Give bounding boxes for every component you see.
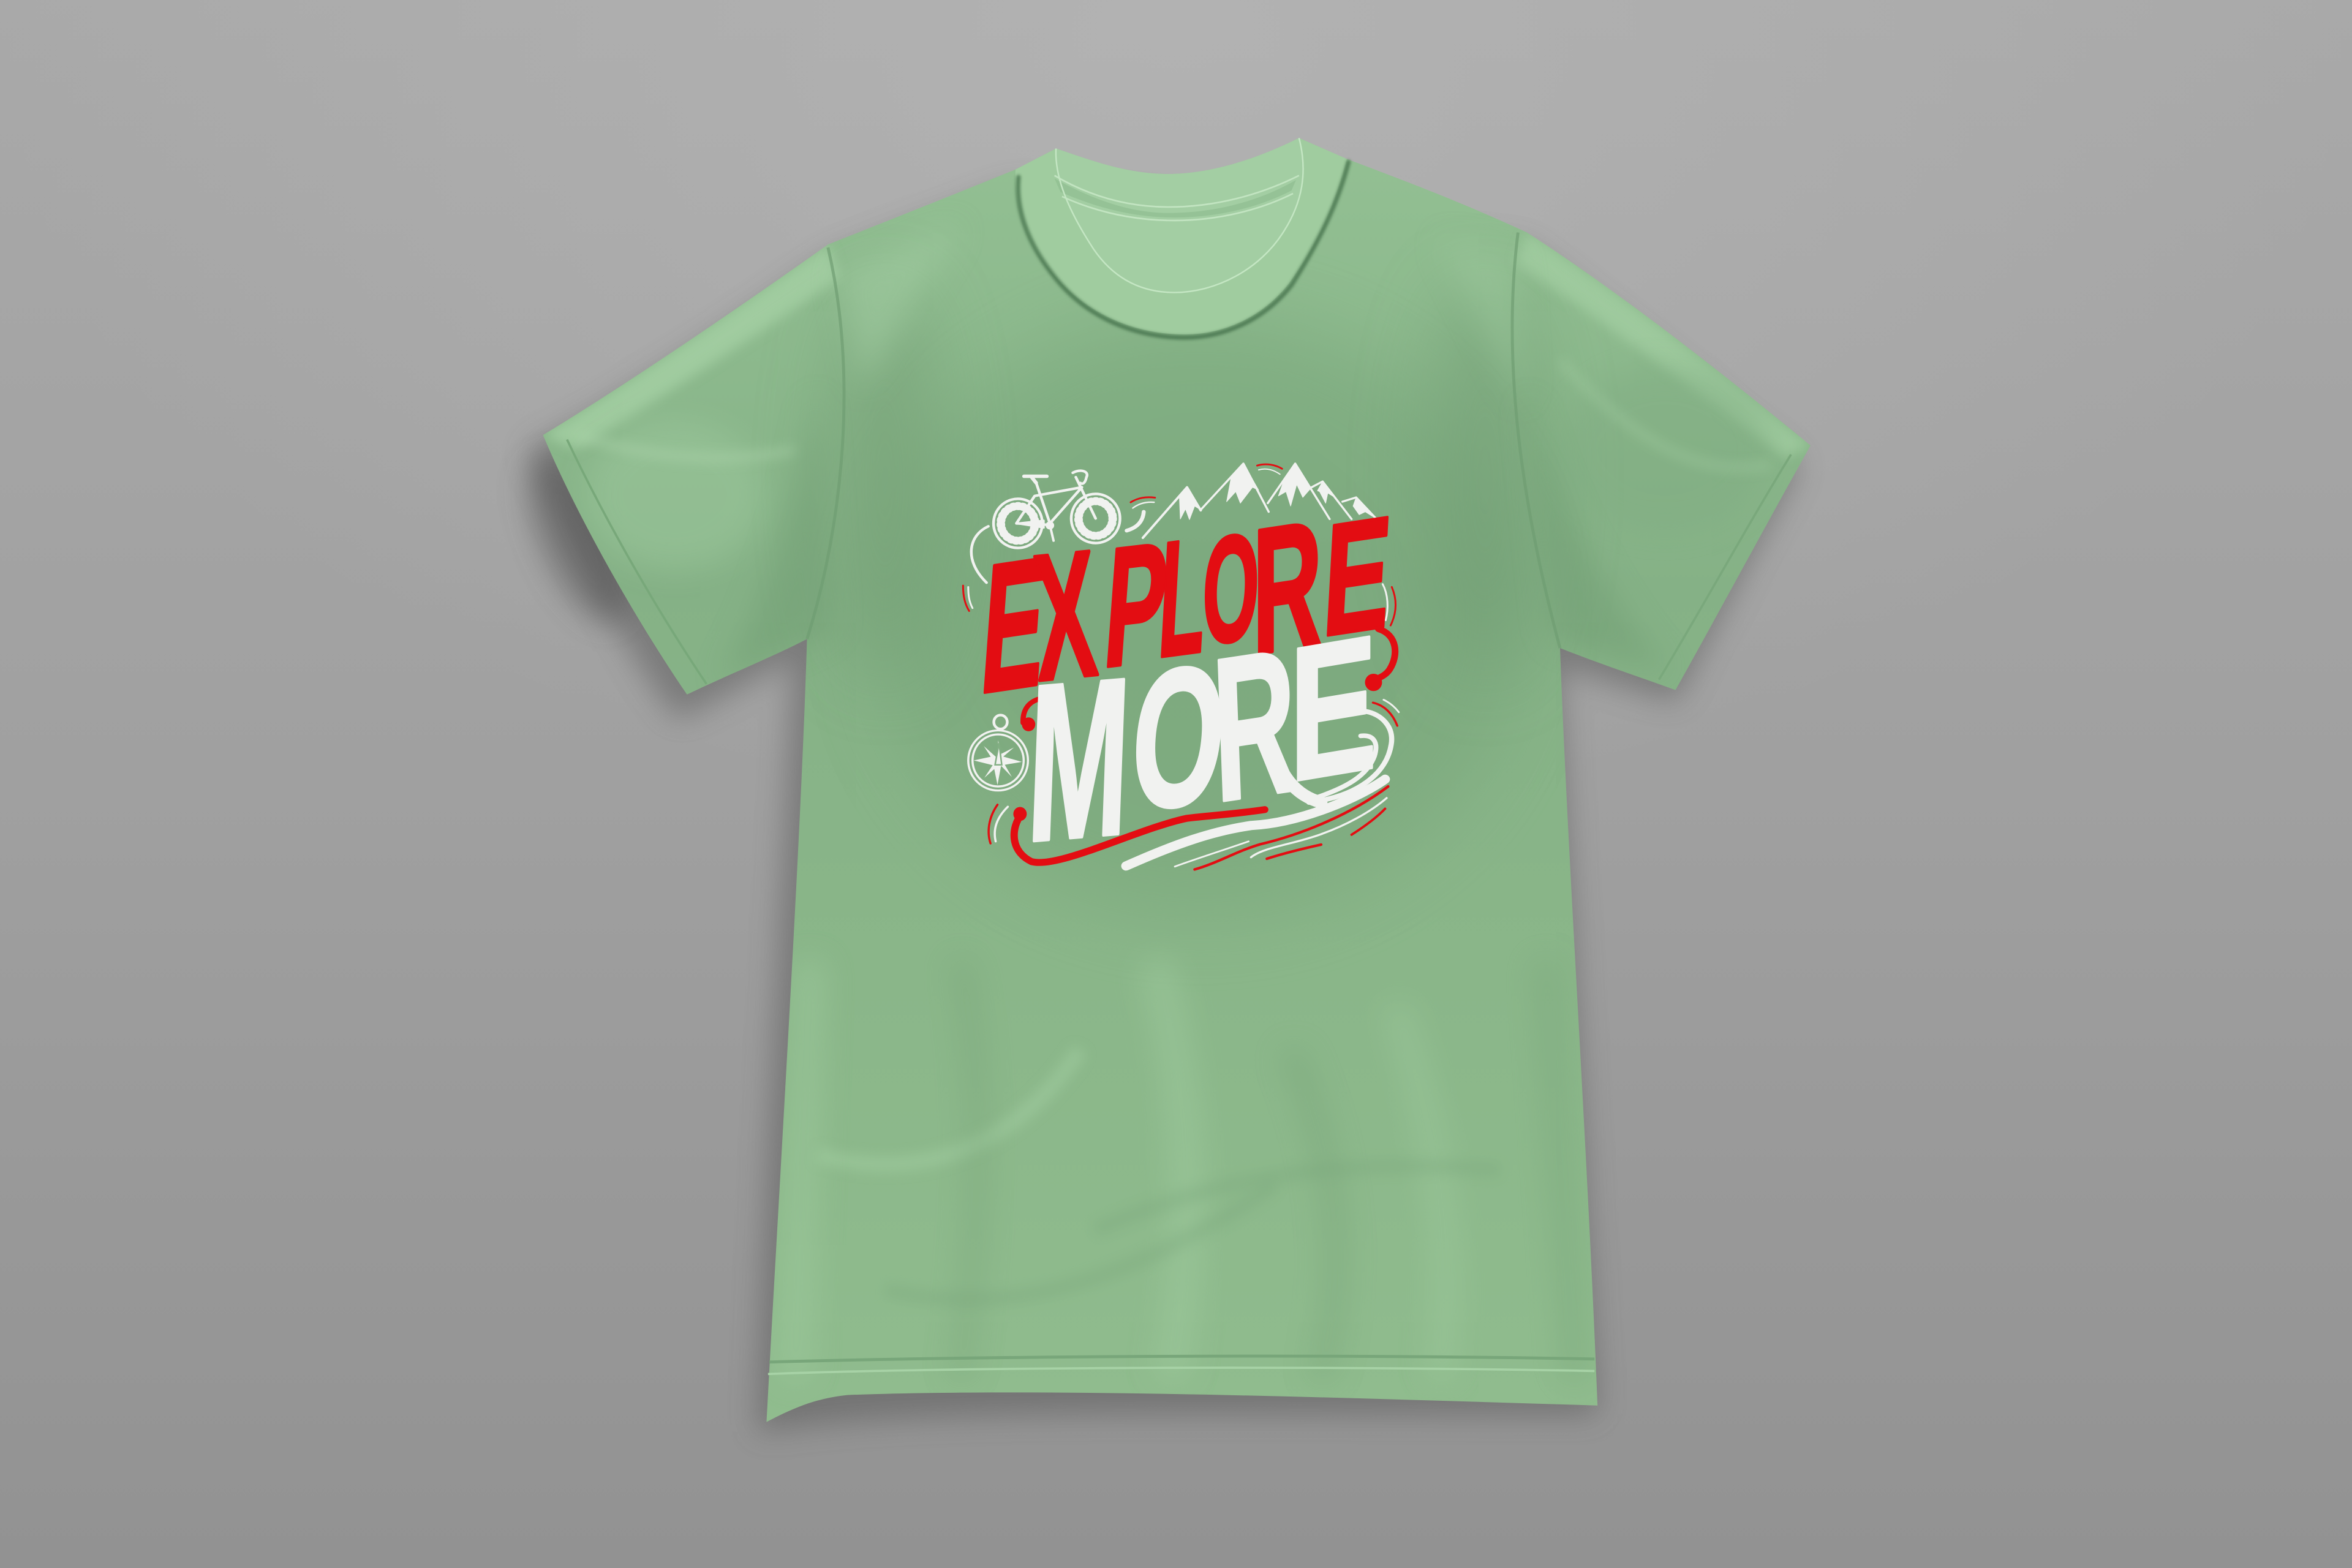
text: MORE <box>1023 595 1377 889</box>
shirt shading and folds <box>543 225 1811 1380</box>
sleeve seams and hem stitching <box>567 233 1791 1374</box>
print design: explore more <box>963 464 1399 889</box>
text: MORE: O <box>1125 624 1233 851</box>
icon: compass <box>968 715 1028 791</box>
text: MORE: R <box>1209 606 1300 845</box>
panel: t-shirt <box>507 138 1811 1433</box>
text: EXPLORE: L <box>1155 503 1211 693</box>
shirt shadow <box>507 187 1800 1433</box>
text: EXPLORE: P <box>1099 507 1174 704</box>
text: EXPLORE: O <box>1199 502 1262 677</box>
text: EXPLORE <box>975 482 1395 733</box>
text: EXPLORE: R <box>1253 482 1322 692</box>
icon: bicycle <box>993 471 1120 548</box>
text: EXPLORE: E <box>1319 483 1395 671</box>
decorative swashes <box>963 464 1399 870</box>
collar <box>1016 138 1349 337</box>
text: MORE: M <box>1023 631 1134 889</box>
icon: mountains <box>1143 464 1376 538</box>
text: MORE: E <box>1289 595 1377 823</box>
text: EXPLORE: X <box>1030 513 1101 719</box>
shirt body <box>543 138 1811 1422</box>
text: EXPLORE: E <box>975 518 1053 733</box>
